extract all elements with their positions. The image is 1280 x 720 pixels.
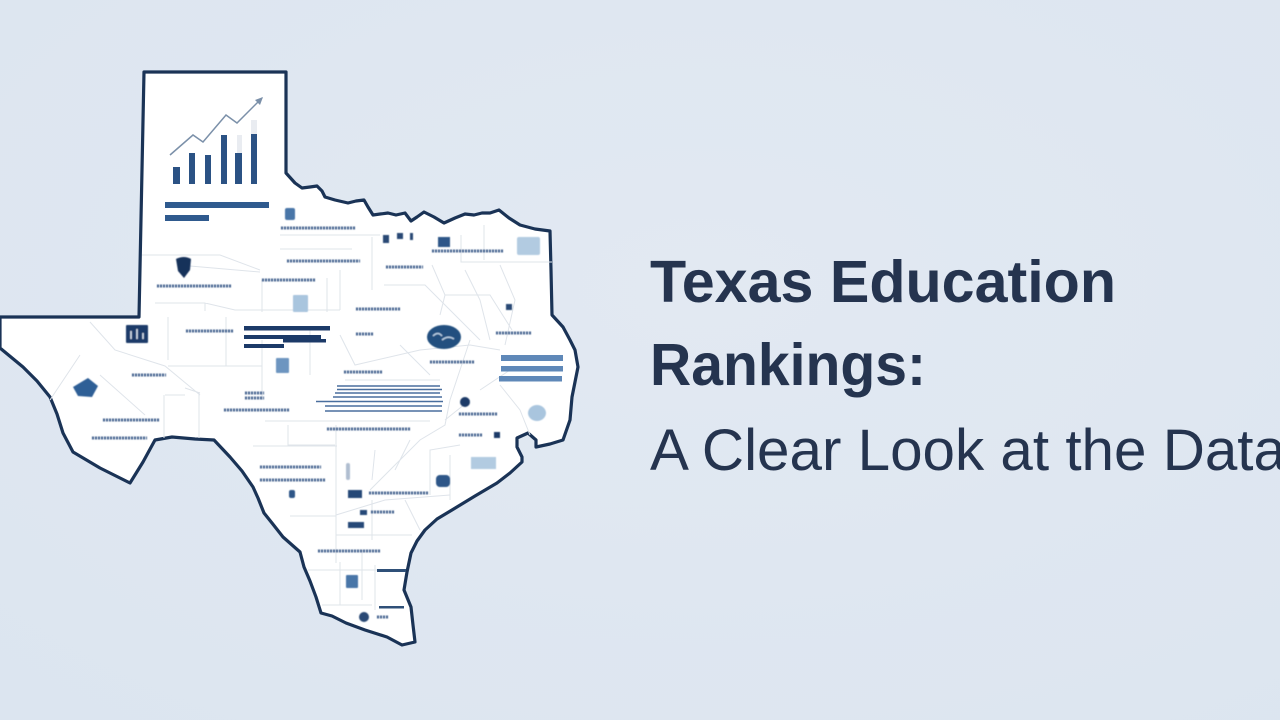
icon: dark circle	[460, 397, 470, 407]
icon: pale document	[293, 295, 308, 312]
horizontal bars: east stripes	[499, 355, 563, 382]
icon: document centre	[276, 358, 289, 373]
icon: dark panel west	[126, 325, 148, 343]
map: Texas outline	[0, 72, 578, 645]
horizontal bars: south segments	[377, 569, 406, 608]
heading: title	[650, 249, 1116, 398]
icon: small blocks south centre	[348, 490, 367, 528]
icon: school north	[438, 237, 450, 247]
icon: small marker east	[506, 304, 512, 310]
icon: gray pill	[346, 463, 350, 480]
map icons	[73, 208, 546, 622]
horizontal lines: central data stripes	[316, 386, 443, 411]
icon: cube west	[73, 378, 98, 397]
heading: title: Texas Education	[650, 249, 1116, 315]
illegible micro labels	[92, 228, 532, 617]
icon: shield	[176, 257, 191, 278]
icon: small shield south	[289, 490, 295, 498]
county boundary lines	[50, 225, 552, 610]
chart: bar chart with rising trend line	[170, 97, 263, 184]
icon: dark dot east	[494, 432, 500, 438]
icon: pale map box northeast	[517, 237, 540, 255]
icon: pale bowl	[528, 405, 546, 421]
icon: pale striped box	[471, 457, 496, 469]
icon: oval blob	[427, 325, 461, 349]
icon: small figure south tip	[359, 612, 369, 622]
horizontal bars: centre-west block	[244, 326, 330, 348]
heading: title: Rankings:	[650, 332, 926, 398]
subtitle: A Clear Look at the Data	[650, 418, 1280, 483]
icon: document south	[346, 575, 358, 588]
icon: small cluster north	[383, 233, 413, 243]
icon: round badge	[436, 475, 450, 487]
chart caption bars	[165, 202, 269, 221]
icon: building blue	[285, 208, 295, 220]
